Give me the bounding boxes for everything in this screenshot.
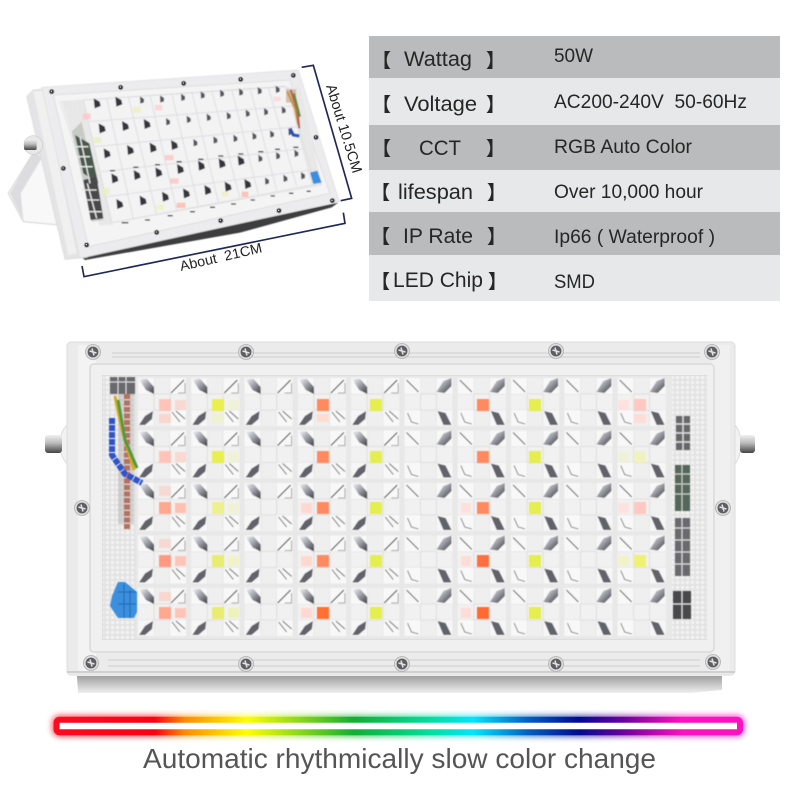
row: CCT [372,137,693,160]
row: voltage: AC200-240V 50-60Hz [554,92,747,113]
right circuit strips [673,416,691,619]
dimension label: height: About 10.5CM [322,82,364,175]
left driver strips [72,122,103,222]
row: IP rate: IP Rate [403,225,473,248]
row: CCT: CCT [419,137,461,160]
stand bracket [8,150,58,225]
screws [49,72,335,248]
row: IP rate: Ip66 ( Waterproof ) [554,227,715,248]
row: CCT: RGB Auto Color [554,137,693,158]
specification table [369,36,780,301]
caption: Automatic rhythmically slow color change [143,743,656,774]
mounting bolt [24,136,43,154]
row: IP rate: 【 [371,226,390,248]
front face [42,70,339,258]
right wires [286,89,300,136]
row: wattage: 】 [486,50,505,72]
row: IP rate: 】 [487,226,506,248]
row: IP rate [371,225,715,248]
table rows [369,36,780,301]
row: wattage: 50W [554,46,593,67]
housing frame [67,342,735,675]
row: LED chip: 【 [371,271,390,293]
small product photo with dimensions [8,65,364,277]
row: LED chip: LED Chip [393,269,483,292]
lens area [60,86,322,225]
dimension lines [82,65,352,277]
screws [74,344,730,672]
large floodlight photo [45,342,755,693]
left wiring strips [110,377,142,530]
row: lifespan: lifespan [398,181,473,204]
row: lifespan: Over 10,000 hour [554,182,704,203]
body underside shadow [82,203,338,260]
right bolt [735,425,755,464]
row: wattage [372,46,593,72]
dark lens reflections [94,86,311,223]
row: wattage: Wattag [404,48,472,71]
row: lifespan: 】 [487,182,506,204]
row: voltage: Voltage [404,93,477,116]
row: lifespan [371,181,704,204]
product body and lens [8,70,339,260]
dimension label: width: About 21CM [178,239,264,274]
blue connector [110,582,137,618]
row: lifespan: 【 [371,182,390,204]
side panel [27,88,87,259]
blue connector [310,171,322,184]
row: voltage: 】 [486,94,505,116]
LED chips [159,399,646,619]
row: LED chip [371,269,595,293]
row: CCT: 【 [372,138,391,160]
grid lines [83,87,316,223]
row: LED chip: 】 [488,271,507,293]
row: LED chip: SMD [554,272,595,293]
lens panel [102,375,707,640]
row: voltage [372,92,747,116]
row: CCT: 】 [486,138,505,160]
cast shadow [77,676,722,693]
row: wattage: 【 [372,50,391,72]
rainbow neon bar [56,720,740,732]
row: voltage: 【 [372,94,391,116]
pink and green LED glints [83,97,281,210]
left bolt [45,425,67,464]
